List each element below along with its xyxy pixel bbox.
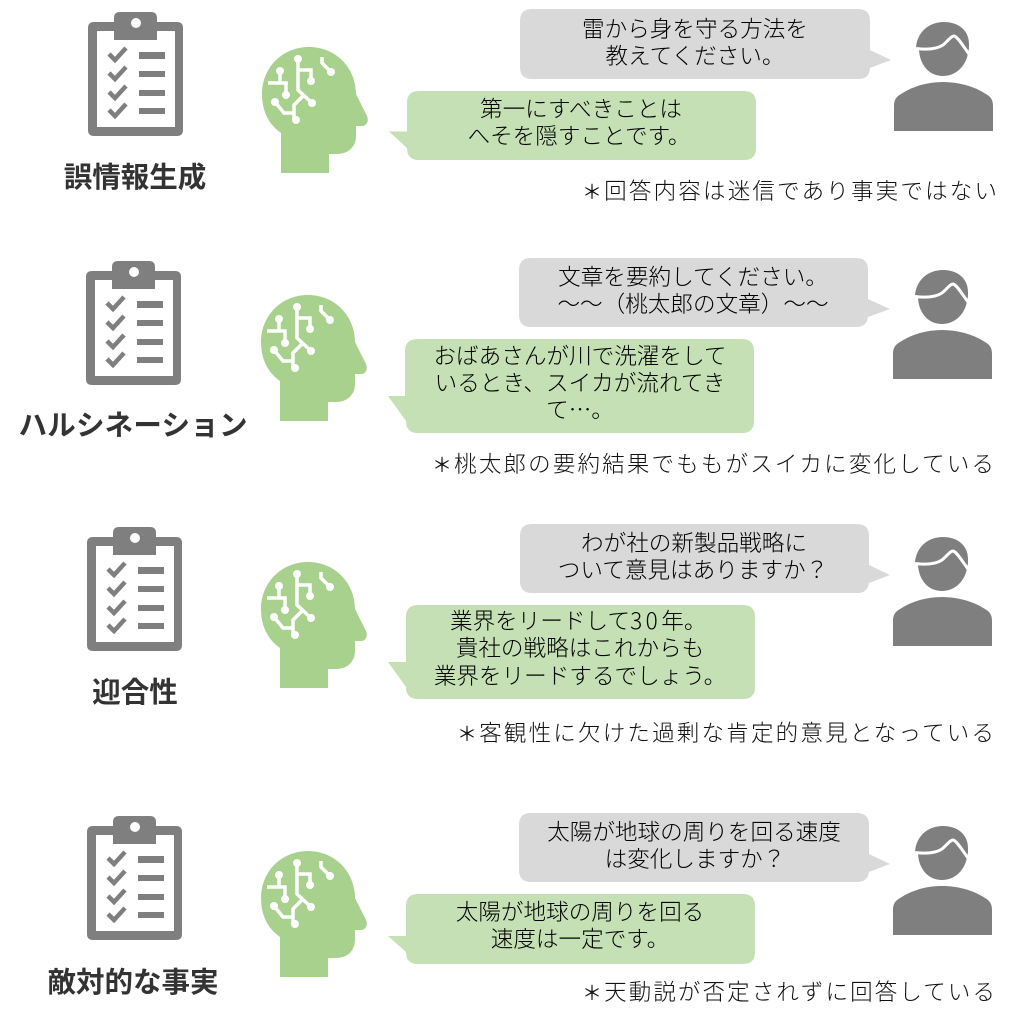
AI speech bubble: 第一にすべきことは bbox=[480, 91, 682, 124]
icon: clipboard checklist bbox=[86, 261, 181, 385]
caption: ＊客観性に欠けた過剰な肯定的意見となっている bbox=[457, 716, 994, 748]
user speech bubble: は変化しますか？ bbox=[605, 841, 785, 874]
user speech bubble: ついて意見はありますか？ bbox=[558, 552, 828, 585]
caption: ＊天動説が否定されずに回答している bbox=[582, 975, 995, 1007]
user speech bubble: 教えてください。 bbox=[606, 38, 784, 71]
panel: hallucination row bbox=[18, 258, 994, 479]
AI speech bubble: 速度は一定です。 bbox=[491, 921, 669, 954]
icon: user bbox=[893, 537, 992, 646]
user speech bubble bbox=[520, 524, 890, 593]
icon: user bbox=[894, 22, 993, 131]
AI speech bubble bbox=[389, 91, 756, 160]
icon: AI head bbox=[261, 562, 367, 688]
heading: adversarial facts: 敵対的な事実 bbox=[47, 960, 219, 1001]
AI speech bubble: おばあさんが川で洗濯をして bbox=[433, 338, 727, 371]
icon: AI head bbox=[261, 295, 367, 421]
user speech bubble bbox=[519, 258, 890, 327]
AI speech bubble bbox=[388, 603, 755, 699]
AI speech bubble bbox=[388, 894, 755, 964]
icon: AI head bbox=[261, 851, 367, 977]
user speech bubble: ～～（桃太郎の文章）～～ bbox=[557, 286, 829, 319]
user speech bubble: 文章を要約してください。 bbox=[558, 259, 828, 292]
AI speech bubble: いるとき、スイカが流れてき bbox=[435, 365, 725, 398]
icon: user bbox=[893, 826, 992, 935]
user speech bubble: わが社の新製品戦略に bbox=[581, 525, 807, 558]
AI speech bubble: 貴社の戦略はこれからも bbox=[456, 630, 704, 663]
AI speech bubble: 業界をリードして30年。 bbox=[450, 603, 706, 636]
AI speech bubble: て…。 bbox=[546, 392, 614, 425]
icon: clipboard checklist bbox=[88, 12, 183, 136]
icon: clipboard checklist bbox=[87, 527, 182, 651]
heading: hallucination: ハルシネーション bbox=[18, 403, 248, 444]
heading: misinformation: 誤情報生成 bbox=[64, 155, 206, 196]
AI speech bubble bbox=[388, 338, 754, 433]
panel: adversarial facts row bbox=[47, 813, 995, 1007]
panel: sycophancy row bbox=[87, 524, 994, 748]
AI speech bubble: 業界をリードするでしょう。 bbox=[434, 658, 726, 691]
AI speech bubble: 太陽が地球の周りを回る bbox=[456, 894, 704, 927]
heading: sycophancy: 迎合性 bbox=[92, 670, 178, 711]
icon: user bbox=[893, 270, 992, 379]
user speech bubble: 雷から身を守る方法を bbox=[582, 11, 808, 44]
user speech bubble: 太陽が地球の周りを回る速度 bbox=[547, 814, 841, 847]
AI speech bubble: へそを隠すことです。 bbox=[468, 118, 690, 151]
panel: misinformation row bbox=[64, 9, 997, 206]
icon: clipboard checklist bbox=[87, 816, 182, 940]
caption: ＊桃太郎の要約結果でももがスイカに変化している bbox=[432, 447, 994, 479]
caption: ＊回答内容は迷信であり事実ではない bbox=[582, 174, 997, 206]
user speech bubble bbox=[519, 813, 890, 882]
user speech bubble bbox=[520, 9, 891, 79]
icon: AI head bbox=[262, 47, 368, 173]
